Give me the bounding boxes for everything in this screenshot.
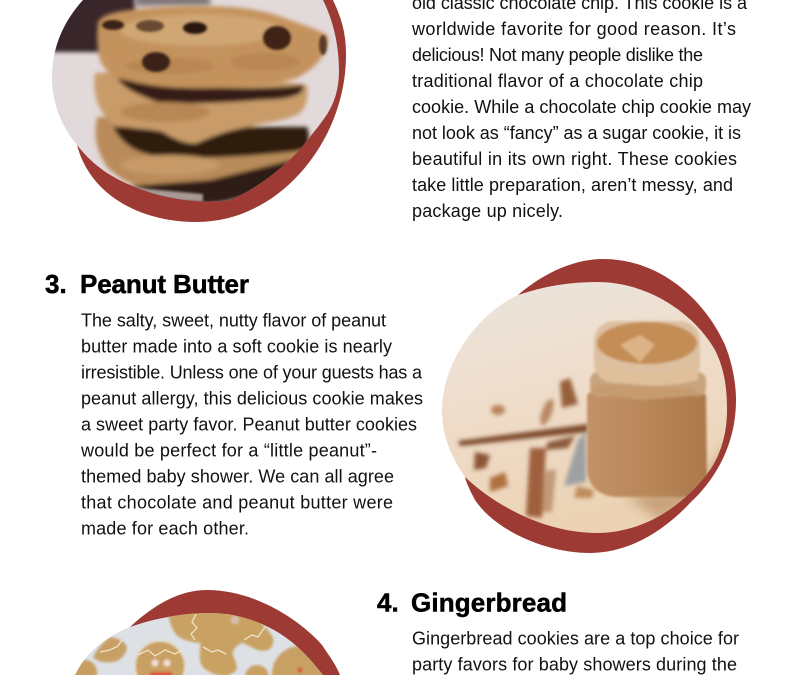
heading: 4. Gingerbread: 4. (377, 588, 399, 618)
peanut butter jar photo (442, 282, 727, 533)
section 2 body text: not look as “fancy” as a sugar cookie, it is (412, 123, 741, 143)
section 3 body text: made for each other. (81, 518, 249, 538)
gingerbread cookies photo (75, 613, 323, 675)
heading: 3. Peanut Butter: 3. (45, 269, 67, 299)
section 3 body text: themed baby shower. We can all agree (81, 466, 394, 486)
section 4 body text: Gingerbread cookies are a top choice for (412, 628, 739, 648)
photo: gingerbread cookies with red blob (70, 590, 340, 675)
cookie stack photo (52, 0, 339, 202)
section 2 body text (411, 0, 751, 221)
section 2 body text: take little preparation, aren’t messy, and (412, 175, 733, 195)
section 3 body text: would be perfect for a “little peanut”- (80, 440, 377, 460)
red blob behind gingerbread photo (120, 590, 340, 675)
section 2 body text: cookie. While a chocolate chip cookie may (412, 97, 751, 117)
section 4 body text: party favors for baby showers during the (412, 654, 737, 674)
red blob behind peanut butter photo (465, 259, 736, 553)
red blob behind cookie photo (77, 0, 346, 222)
heading: 3. Peanut Butter: Peanut Butter (80, 269, 249, 299)
section 2 body text: worldwide favorite for good reason. It’s (411, 19, 736, 39)
section 3 body text: The salty, sweet, nutty flavor of peanut (81, 310, 386, 330)
section 4 body text (412, 628, 739, 674)
section 2 body text: traditional flavor of a chocolate chip (412, 71, 703, 91)
section 2 body text: package up nicely. (412, 201, 563, 221)
photo: chocolate chip cookies with red blob (40, 0, 350, 222)
heading: 4. Gingerbread: Gingerbread (411, 588, 567, 618)
section 3 body text: irresistible. Unless one of your guests has a (81, 362, 423, 382)
section 2 body text: beautiful in its own right. These cookies (412, 149, 737, 169)
photo: peanut butter jar with red blob (430, 259, 740, 553)
section 3 body text: peanut allergy, this delicious cookie makes (81, 388, 423, 408)
section 3 body text: that chocolate and peanut butter were (81, 492, 393, 512)
section 2 body text: delicious! Not many people dislike the (412, 45, 703, 65)
section 3 body text: a sweet party favor. Peanut butter cookies (81, 414, 417, 434)
section 3 body text (80, 310, 423, 538)
section 3 body text: butter made into a soft cookie is nearly (81, 336, 392, 356)
